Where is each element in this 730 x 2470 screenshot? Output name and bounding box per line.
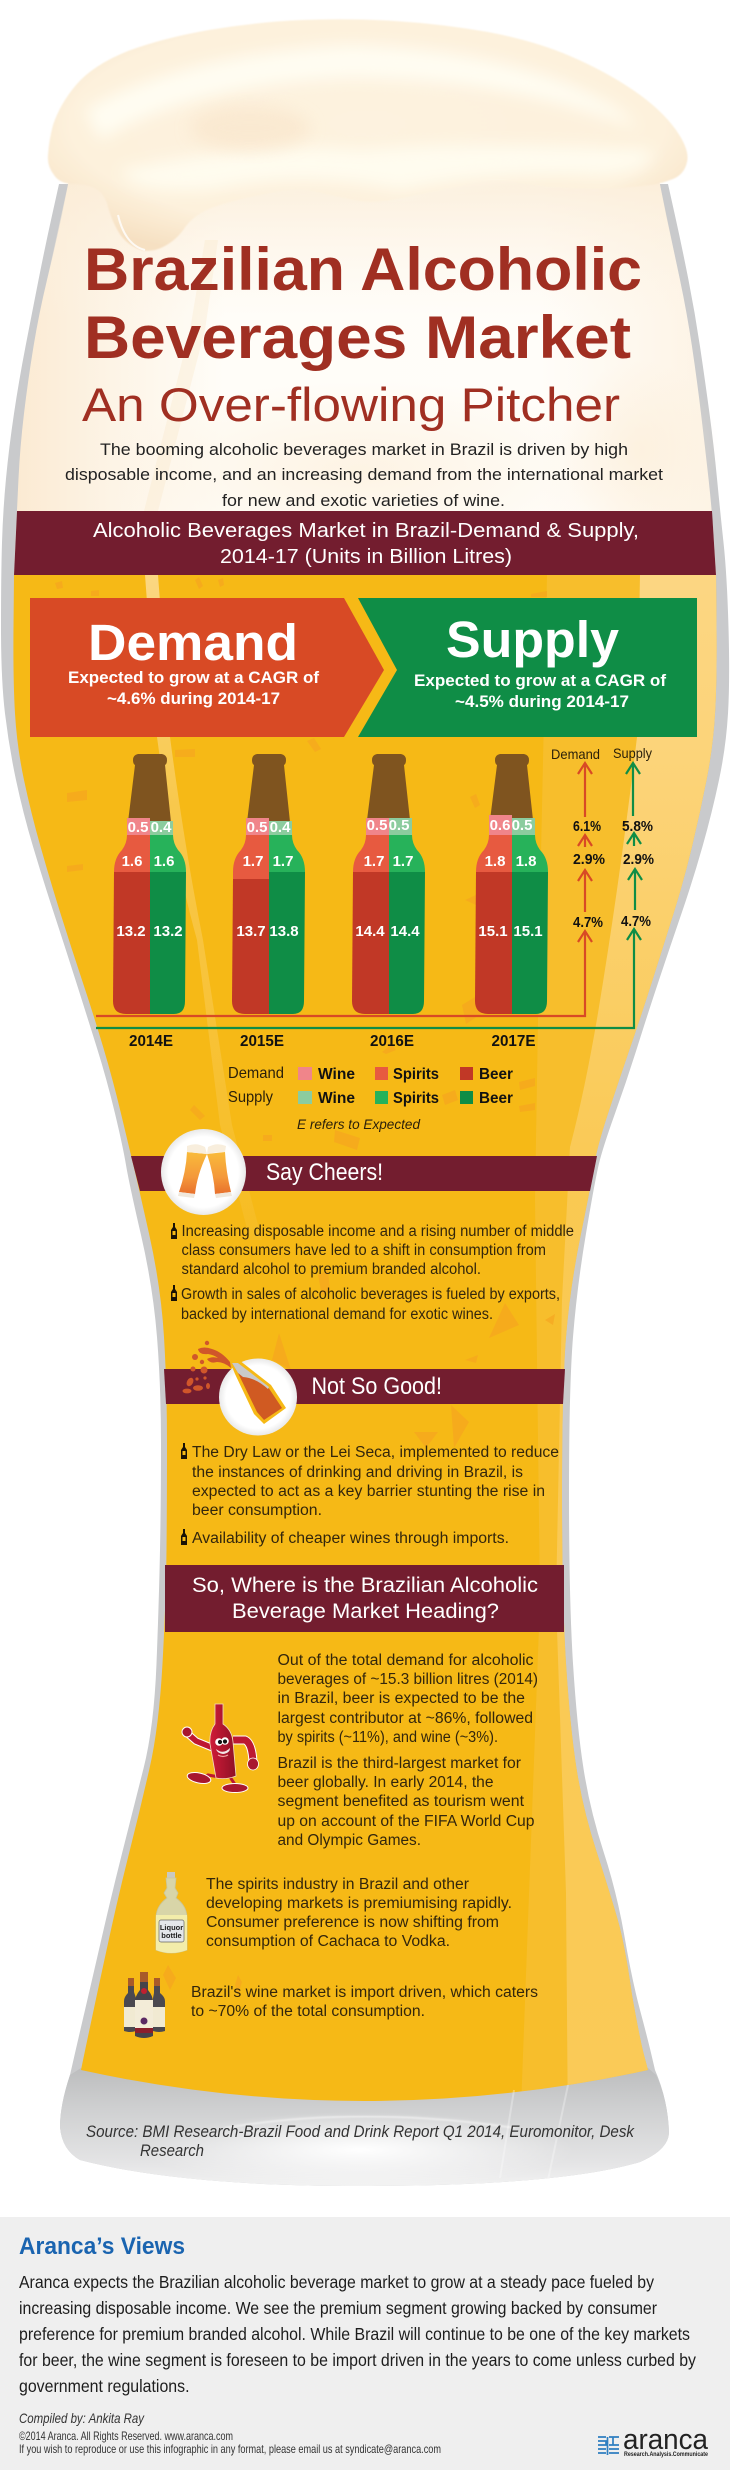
growth labels: 4.7% — [573, 914, 603, 931]
text: wine paragraph: to ~70% of the total consumption. — [191, 2003, 425, 2020]
bottle chart 2016E: 0.5 — [389, 817, 409, 834]
cream glow — [100, 380, 620, 560]
intro text: The booming alcoholic beverages market in Brazil is driven by high — [100, 440, 628, 459]
growth labels: 2.9% — [573, 851, 605, 868]
bottle chart 2016E: 14.4 — [390, 923, 420, 940]
views text: government regulations. — [19, 2376, 190, 2396]
legend note: E refers to Expected — [297, 1116, 421, 1132]
banner: market heading: Beverage Market Heading? — [232, 1600, 499, 1623]
cream streak — [144, 240, 218, 511]
icon: bottle bullet — [171, 1223, 177, 1239]
bottle chart 2014E: 13.2 — [116, 923, 146, 940]
bottle chart 2014E: 0.4 — [151, 819, 172, 836]
bottle chart 2017E: 15.1 — [513, 923, 543, 940]
source note: Source: BMI Research-Brazil Food and Drink Report Q1 2014, Euromonitor, Desk — [86, 2123, 635, 2141]
foam top highlight — [85, 45, 640, 140]
icon: bottle bullet 3 — [181, 1443, 187, 1459]
cream glow right — [560, 360, 720, 540]
views text: increasing disposable income. We see the premium segment growing backed by consumer — [19, 2298, 657, 2318]
bottle chart 2015E: 1.7 — [273, 853, 293, 870]
icon: liquor bottle: Liquor — [160, 1923, 183, 1932]
text: say cheers bullets: Growth in sales of alcoholic beverages is fueled by exports, — [181, 1286, 560, 1303]
panel: demand arrow — [30, 598, 384, 737]
banner: not so good — [164, 1369, 565, 1404]
banner: say cheers — [131, 1156, 597, 1191]
banner: not so good: Not So Good! — [312, 1373, 442, 1400]
cream upper tint — [14, 180, 716, 575]
text: beer demand paragraph: beverages of ~15.3 billion litres (2014) — [278, 1671, 538, 1688]
glass base — [60, 2068, 669, 2186]
bottle chart 2014E — [113, 754, 186, 1014]
icon: spilling bottle — [182, 1341, 297, 1436]
title line 1: Brazilian Alcoholic — [84, 236, 642, 303]
panel: supply arrow: ~4.5% during 2014-17 — [455, 692, 629, 711]
icon: running bottle mascot — [182, 1704, 258, 1792]
bottle chart 2016E: 14.4 — [355, 923, 385, 940]
bottle chart 2015E — [232, 754, 305, 1014]
text: beer demand paragraph: by spirits (~11%), and wine (~3%). — [278, 1729, 498, 1746]
growth labels: Demand — [551, 746, 600, 762]
text: spirits paragraph: The spirits industry in Brazil and other — [206, 1876, 469, 1893]
growth labels: 2.9% — [623, 851, 654, 868]
bottle chart 2017E — [475, 754, 548, 1014]
panel: supply arrow: Supply — [446, 611, 620, 668]
banner: demand and supply heading: Alcoholic Beverages Market in Brazil-Demand & Supply, — [93, 520, 639, 542]
foam drip highlight — [118, 215, 145, 250]
text: say cheers bullets: backed by international demand for exotic wines. — [181, 1306, 493, 1323]
credits: ©2014 Aranca. All Rights Reserved. www.aranca.com — [19, 2429, 233, 2443]
panel: demand arrow: ~4.6% during 2014-17 — [107, 689, 280, 708]
text: not so good bullets: expected to act as a key barrier stunting the rise in — [192, 1483, 545, 1500]
growth labels: 4.7% — [621, 913, 651, 930]
intro text — [65, 440, 663, 510]
bottle chart 2015E: 0.5 — [247, 819, 267, 836]
bottle chart 2015E: 13.8 — [269, 923, 299, 940]
text: not so good bullets: The Dry Law or the Lei Seca, implemented to reduce — [192, 1444, 559, 1461]
source note: Research — [140, 2142, 204, 2160]
legend: Supply — [228, 1089, 273, 1106]
bottle chart 2017E: 1.8 — [485, 853, 505, 870]
title — [82, 236, 642, 431]
legend: Demand — [228, 1065, 284, 1082]
banner: demand and supply heading: 2014-17 (Units in Billion Litres) — [220, 546, 512, 568]
foam shadow — [190, 106, 310, 150]
icon: clinking beer glasses — [161, 1129, 246, 1215]
beer highlights — [145, 575, 730, 2135]
icon: bottle bullet 4 — [181, 1529, 187, 1545]
text: beer market paragraph: up on account of the FIFA World Cup — [278, 1813, 534, 1830]
text: not so good bullets: the instances of drinking and driving in Brazil, is — [192, 1464, 523, 1481]
confetti — [55, 577, 555, 1995]
text: beer market paragraph — [278, 1755, 534, 1849]
bottle chart 2017E: 1.8 — [516, 853, 536, 870]
foam lower highlight — [120, 145, 651, 191]
text: beer demand paragraph: largest contributor at ~86%, followed — [278, 1710, 533, 1727]
banner: market heading: So, Where is the Brazilian Alcoholic — [192, 1574, 538, 1597]
icon: liquor bottle: bottle — [161, 1931, 182, 1940]
legend — [228, 1065, 513, 1107]
text: spirits paragraph: consumption of Cachaca to Vodka. — [206, 1933, 450, 1950]
text: beer market paragraph: Brazil is the third-largest market for — [278, 1755, 521, 1772]
logo: aranca: aranca — [623, 2424, 709, 2456]
legend: Wine — [318, 1066, 355, 1083]
panel: aranca views — [0, 2217, 730, 2470]
legend: Wine — [318, 1090, 355, 1107]
bottle chart 2017E: 15.1 — [478, 923, 508, 940]
legend: Beer — [479, 1090, 513, 1107]
base highlight — [145, 2112, 575, 2188]
bottle chart 2014E: 13.2 — [153, 923, 183, 940]
panel: demand arrow: Expected to grow at a CAGR of — [68, 668, 319, 687]
text: beer demand paragraph: in Brazil, beer is expected to be the — [278, 1690, 525, 1707]
bottle chart 2014E: 1.6 — [122, 853, 142, 870]
icon: liquor bottle — [156, 1872, 187, 1953]
intro text: for new and exotic varieties of wine. — [222, 491, 505, 510]
text: not so good bullets: Availability of cheaper wines through imports. — [192, 1530, 509, 1547]
bottle chart 2016E: 1.7 — [393, 853, 413, 870]
base rim — [225, 2116, 515, 2128]
bottle chart 2016E: 0.5 — [367, 817, 387, 834]
text: beer market paragraph: beer globally. In early 2014, the — [278, 1774, 494, 1791]
foam — [48, 19, 688, 251]
text: say cheers bullets: standard alcohol to premium branded alcohol. — [182, 1261, 481, 1278]
growth labels: 5.8% — [622, 818, 653, 835]
growth labels: 6.1% — [573, 818, 601, 835]
year labels: 2014E — [129, 1033, 173, 1050]
banner: say cheers: Say Cheers! — [266, 1159, 383, 1186]
legend: Spirits — [393, 1090, 439, 1107]
arrow: supply growth — [96, 763, 642, 1028]
text: spirits paragraph: Consumer preference is now shifting from — [206, 1914, 499, 1931]
bottle chart 2017E: 0.6 — [490, 817, 510, 834]
credits — [19, 2410, 441, 2456]
credits: If you wish to reproduce or use this infographic in any format, please email us at syndicate@aranca.com — [19, 2442, 441, 2456]
cream upper beer — [14, 180, 716, 575]
text: not so good bullets: beer consumption. — [192, 1502, 322, 1519]
views heading: Aranca’s Views — [19, 2233, 185, 2260]
glass reflection on base — [500, 2085, 568, 2180]
subtitle: An Over-flowing Pitcher — [82, 378, 620, 431]
title line 2: Beverages Market — [84, 304, 631, 371]
text: spirits paragraph — [206, 1876, 512, 1950]
bottle chart 2016E: 1.7 — [364, 853, 384, 870]
foam head — [48, 19, 688, 251]
year labels: 2016E — [370, 1033, 414, 1050]
legend: Beer — [479, 1066, 513, 1083]
text: wine paragraph: Brazil's wine market is import driven, which caters — [191, 1984, 538, 2001]
logo: aranca: Research.Analysis.Communicate — [624, 2451, 708, 2458]
intro text: disposable income, and an increasing demand from the international market — [65, 465, 663, 484]
text: say cheers bullets — [171, 1223, 574, 1323]
text: spirits paragraph: developing markets is premiumising rapidly. — [206, 1895, 512, 1912]
growth labels — [551, 745, 654, 931]
banner: market heading — [165, 1565, 564, 1632]
panel: supply arrow — [358, 598, 697, 737]
icon: wine bottles — [124, 1972, 165, 2038]
text: beer demand paragraph: Out of the total demand for alcoholic — [278, 1652, 534, 1669]
year labels: 2015E — [240, 1033, 284, 1050]
legend: Spirits — [393, 1066, 439, 1083]
credits: Compiled by: Ankita Ray — [19, 2410, 145, 2426]
bottle chart 2015E: 1.7 — [243, 853, 263, 870]
text: beer market paragraph: segment benefited as tourism went — [278, 1793, 525, 1810]
views text — [19, 2272, 696, 2396]
bottle chart 2015E: 13.7 — [236, 923, 266, 940]
growth labels: Supply — [613, 745, 652, 761]
arrow: demand growth — [96, 763, 592, 1016]
panel: supply arrow: Expected to grow at a CAGR of — [414, 671, 666, 690]
year labels — [129, 1033, 536, 1050]
banner: demand and supply heading — [14, 511, 716, 575]
source note — [86, 2123, 635, 2160]
text: beer market paragraph: and Olympic Games. — [278, 1832, 421, 1849]
bottle chart 2015E: 0.4 — [270, 819, 291, 836]
bottle chart 2014E: 0.5 — [128, 819, 148, 836]
year labels: 2017E — [492, 1033, 536, 1050]
text: say cheers bullets: class consumers have led to a shift in consumption from — [182, 1242, 546, 1259]
text: say cheers bullets: Increasing disposable income and a rising number of middle — [182, 1223, 574, 1240]
panel: demand arrow: Demand — [88, 614, 298, 671]
yellow beer — [13, 575, 717, 2101]
text: not so good bullets — [181, 1443, 559, 1547]
text: beer demand paragraph — [278, 1652, 538, 1746]
views text: Aranca expects the Brazilian alcoholic beverage market to grow at a steady pace fueled by — [19, 2272, 654, 2292]
bottle chart 2014E: 1.6 — [154, 853, 174, 870]
text: wine paragraph — [191, 1984, 538, 2020]
bottle chart 2016E — [352, 754, 425, 1014]
bottle chart 2017E: 0.5 — [512, 817, 532, 834]
icon: bottle bullet 2 — [171, 1285, 177, 1301]
